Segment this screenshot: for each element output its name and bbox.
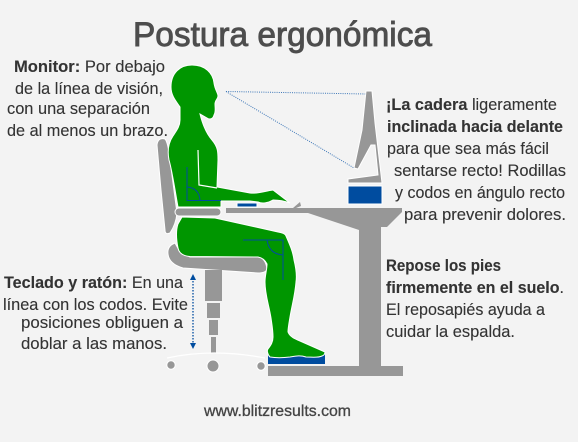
base arc — [167, 353, 265, 358]
text block: keyboard and mouse: doblar a las manos. — [21, 334, 167, 353]
text block: feet — [386, 256, 564, 341]
text block: keyboard and mouse: Teclado y ratón: En una — [4, 273, 184, 292]
text block: hip — [386, 95, 566, 224]
elbow angle marker — [187, 167, 221, 200]
text block: monitor: con una separación — [7, 99, 150, 118]
text block: feet: firmemente en el suelo. — [386, 278, 564, 297]
text block: keyboard and mouse — [3, 273, 188, 353]
column — [205, 270, 222, 353]
text block: keyboard and mouse: línea con los codos. Evite — [3, 295, 188, 314]
monitor — [348, 91, 382, 183]
text block: monitor: de la línea de visión, — [15, 79, 163, 98]
text block: hip: ¡La cadera ligeramente — [386, 95, 557, 114]
figure — [168, 65, 325, 358]
text block: monitor — [7, 57, 168, 140]
footrest — [268, 354, 325, 364]
title: Postura ergonómica — [133, 16, 432, 54]
text block: hip: inclinada hacia delante — [387, 117, 563, 136]
text block: hip: sentarse recto! Rodillas — [394, 161, 566, 180]
knee angle marker — [243, 240, 283, 280]
seat — [168, 243, 267, 273]
text block: hip: para prevenir dolores. — [404, 205, 566, 224]
height arrow — [190, 274, 196, 349]
keyboard — [237, 203, 257, 207]
legs — [176, 217, 325, 358]
text block: hip: y codos en ángulo recto — [395, 183, 565, 202]
text block: monitor: Monitor: Por debajo — [14, 57, 165, 76]
desk — [226, 202, 403, 376]
armrest — [175, 208, 221, 216]
text block: feet: Repose los pies — [386, 256, 501, 275]
sight lines — [226, 92, 366, 168]
chair back — [157, 139, 177, 234]
chair — [157, 139, 267, 372]
inner arm line — [198, 150, 217, 188]
text block: feet: cuidar la espalda. — [386, 322, 515, 341]
text block: keyboard and mouse: posiciones obliguen a — [21, 313, 184, 332]
torso, head and arm — [168, 65, 290, 207]
text block: feet: El reposapiés ayuda a — [386, 300, 546, 319]
text block: monitor: de al menos un brazo. — [7, 121, 168, 140]
footer url: www.blitzresults.com — [203, 403, 351, 420]
text block: hip: para que sea más fácil — [387, 139, 549, 158]
monitor riser — [348, 186, 382, 204]
wheels — [167, 361, 175, 369]
